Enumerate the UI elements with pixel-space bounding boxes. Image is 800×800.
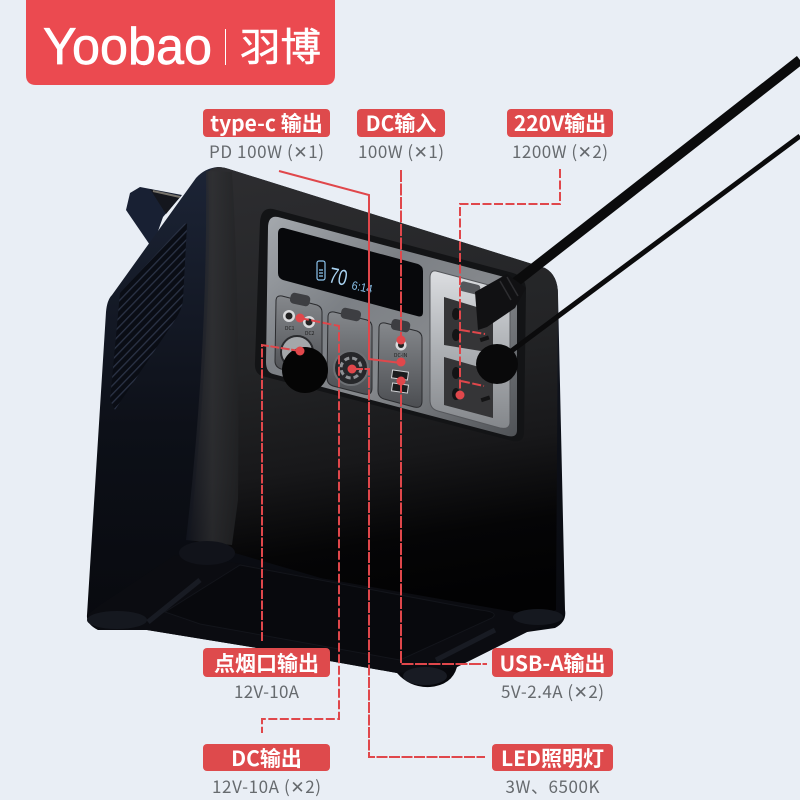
base plate [87, 555, 560, 673]
panel: middle LED lamp [327, 307, 372, 394]
device body side [87, 167, 565, 687]
device body front face [190, 167, 558, 630]
panel: left DC ports: DC2 [305, 330, 315, 337]
socket: upper [444, 297, 493, 353]
logo: Yoobao 羽博: 羽博 [240, 17, 321, 73]
line: USB-A [401, 381, 487, 664]
power station device [87, 167, 565, 687]
cables and plugs [282, 60, 800, 393]
callout: 220V输出: 1200W (✕2) [512, 138, 608, 163]
callout: USB-A输出: USB-A输出 [499, 648, 606, 678]
foot: right [513, 609, 563, 625]
foot: bottom [403, 667, 447, 685]
plug: rectangular [475, 274, 526, 330]
callout: DC输出: DC输出 [231, 743, 302, 773]
callout: 点烟口输出: 12V-10A [234, 678, 300, 703]
callout: DC输入: 100W (✕1) [358, 138, 444, 163]
line: cigarette lighter [262, 345, 300, 642]
cable: thick [512, 60, 800, 285]
foot: rear left [179, 541, 235, 565]
callout: USB-A输出: 5V-2.4A (✕2) [501, 678, 604, 703]
panel: right USB ports [378, 318, 422, 407]
callout: LED照明灯: 3W、6500K [506, 773, 600, 798]
callout dots [296, 314, 464, 400]
handle [126, 187, 182, 248]
callout: DC输入 [357, 108, 445, 163]
callout: DC输出 [203, 743, 330, 798]
callout: type-c 输出: type-c 输出 [210, 108, 323, 138]
panel: left DC ports [275, 292, 322, 378]
socket: lower [444, 357, 493, 418]
callout: LED照明灯 [492, 743, 613, 798]
cigarette lighter plug [282, 347, 328, 393]
callout: 点烟口输出: 点烟口输出 [214, 648, 319, 678]
plug: round [476, 344, 518, 384]
panel: left DC ports: DC1 [285, 325, 295, 332]
line: LED [352, 369, 485, 757]
callout: 点烟口输出 [203, 648, 330, 703]
line: type-c [279, 171, 401, 363]
line: 220V [460, 169, 560, 395]
callout: type-c 输出: PD 100W (✕1) [209, 138, 324, 163]
line: DC input [400, 170, 402, 340]
callout: DC输入: DC输入 [366, 108, 436, 138]
callout: 220V输出 [507, 108, 613, 163]
panel: right USB ports: DC-IN [394, 352, 408, 359]
line: DC output [262, 318, 339, 733]
corner highlight [186, 171, 238, 545]
callout lines [262, 169, 560, 757]
callout: type-c 输出 [203, 108, 330, 163]
logo: Yoobao 羽博: Yoobao [43, 18, 212, 76]
callout: LED照明灯: LED照明灯 [501, 743, 604, 773]
panel: AC sockets [430, 271, 510, 428]
callout: USB-A输出 [492, 648, 613, 703]
display screen: 6:14 [350, 278, 374, 296]
callout: DC输出: 12V-10A (✕2) [212, 773, 321, 798]
callout: 220V输出: 220V输出 [514, 108, 606, 138]
display screen: 70 [327, 262, 350, 291]
foot: left [87, 611, 147, 629]
control panel [255, 209, 526, 441]
cable: thin [510, 136, 800, 352]
battery icon [317, 261, 325, 280]
vent grille [110, 223, 187, 410]
display screen [278, 228, 423, 316]
logo: Yoobao 羽博 [26, 0, 335, 85]
